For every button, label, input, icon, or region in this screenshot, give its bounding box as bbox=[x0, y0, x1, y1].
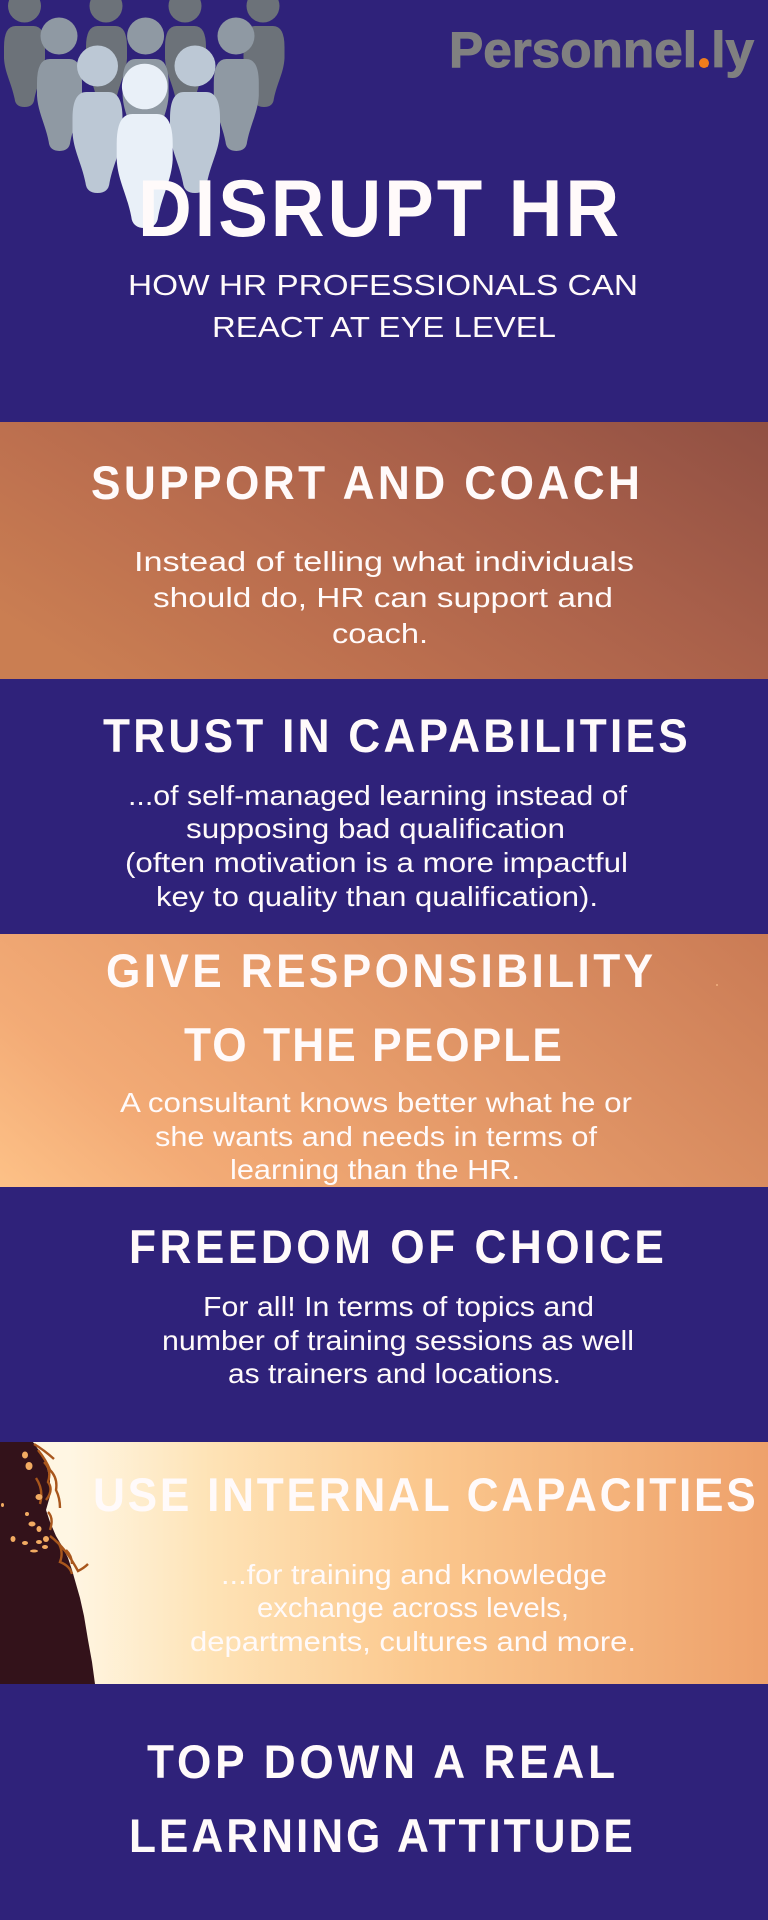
logo: Personnel.ly: Personnel.ly bbox=[449, 22, 754, 78]
text: trust in capabilities body: ...of self-managed learning instead of bbox=[128, 780, 627, 811]
heading: freedom of choice: FREEDOM OF CHOICE bbox=[129, 1221, 664, 1273]
subtitle: REACT AT EYE LEVEL bbox=[212, 312, 556, 344]
heading: give responsibility to the people: TO THE PEOPLE bbox=[184, 1019, 562, 1071]
text: freedom of choice body: For all! In terms of topics and bbox=[203, 1291, 594, 1322]
text: support and coach body: Instead of telling what individuals bbox=[134, 546, 634, 577]
text: freedom of choice body bbox=[162, 1291, 634, 1389]
text: give responsibility body: learning than the HR. bbox=[230, 1154, 520, 1185]
panel: trust in capabilities bbox=[103, 710, 688, 912]
panel: support and coach bbox=[0, 422, 768, 679]
heading: use internal capacities: USE INTERNAL CAPACITIES bbox=[93, 1469, 756, 1521]
heading: trust in capabilities: TRUST IN CAPABILITIES bbox=[103, 710, 688, 762]
panel: use internal capacities bbox=[0, 1442, 768, 1684]
heading: top down a real learning attitude: TOP DOWN A REAL bbox=[147, 1736, 615, 1788]
subtitle: HOW HR PROFESSIONALS CAN bbox=[128, 270, 638, 302]
text: use internal capacities body: departments, cultures and more. bbox=[190, 1626, 636, 1657]
text: trust in capabilities body: supposing bad qualification bbox=[186, 813, 565, 844]
panel: freedom of choice bbox=[129, 1221, 664, 1389]
heading: top down a real learning attitude: LEARNING ATTITUDE bbox=[129, 1810, 633, 1862]
heading: give responsibility to the people bbox=[106, 945, 653, 1071]
icon: group of people bbox=[4, 0, 284, 228]
text: freedom of choice body: number of training sessions as well bbox=[162, 1325, 634, 1356]
text: give responsibility body bbox=[120, 1087, 632, 1185]
text: freedom of choice body: as trainers and locations. bbox=[228, 1358, 561, 1389]
heading: give responsibility to the people: GIVE RESPONSIBILITY bbox=[106, 945, 653, 997]
text: use internal capacities body: exchange across levels, bbox=[257, 1592, 569, 1623]
text: use internal capacities body bbox=[190, 1559, 636, 1657]
heading: top down a real learning attitude bbox=[129, 1736, 633, 1862]
text: give responsibility body: A consultant knows better what he or bbox=[120, 1087, 632, 1118]
text: support and coach body bbox=[134, 546, 634, 649]
text: give responsibility body: she wants and needs in terms of bbox=[155, 1121, 597, 1152]
text: trust in capabilities body: (often motivation is a more impactful bbox=[125, 847, 628, 878]
text: trust in capabilities body: key to quality than qualification). bbox=[156, 881, 598, 912]
small speck on the orange band bbox=[716, 984, 718, 986]
text: trust in capabilities body bbox=[125, 780, 628, 912]
icon: silhouette of woman with curly hair bbox=[0, 1442, 95, 1684]
text: use internal capacities body: ...for training and knowledge bbox=[221, 1559, 607, 1590]
subtitle bbox=[128, 270, 638, 344]
heading: support and coach: SUPPORT AND COACH bbox=[91, 457, 640, 509]
panel: give responsibility bbox=[0, 934, 768, 1187]
text: support and coach body: should do, HR can support and bbox=[153, 582, 613, 613]
title: DISRUPT HR bbox=[138, 164, 619, 254]
text: support and coach body: coach. bbox=[332, 618, 428, 649]
